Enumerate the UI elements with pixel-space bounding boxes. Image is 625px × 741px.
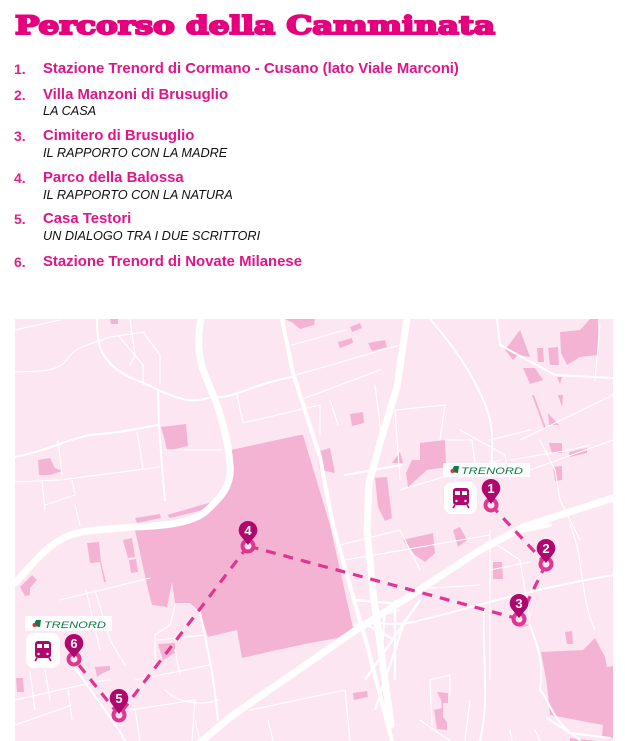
junction ramps [355,600,420,710]
parco della Balossa [135,435,353,658]
stop 3 [14,128,228,160]
icon: train west [26,633,60,668]
stop 3: Cimitero di Brusuglio [43,128,194,144]
walking route [74,505,546,715]
stop 4 [14,170,233,202]
stop 4: IL RAPPORTO CON LA NATURA [43,188,233,202]
marker 6: 6 [70,636,78,651]
trenord label west: TRENORD [44,620,106,631]
marker 4: 4 [244,523,252,538]
marker 4 [239,521,257,552]
park and building blocks [16,319,613,741]
stop 6: 6. [14,254,26,270]
main roads [15,319,613,741]
stop 5: 5. [14,211,26,227]
marker 5 [110,689,128,720]
stop 1: Stazione Trenord di Cormano - Cusano (lato Viale Marconi) [43,61,459,77]
stop 1: 1. [14,61,26,77]
stop 5: UN DIALOGO TRA I DUE SCRITTORI [43,229,260,243]
marker 3: 3 [515,596,523,611]
title: Percorso della Camminata [15,11,495,40]
stop 4: Parco della Balossa [43,170,184,186]
icon: train east [444,482,477,514]
map [15,319,613,741]
marker 1 [482,479,500,510]
marker 2: 2 [542,541,550,556]
stop 2: Villa Manzoni di Brusuglio [43,87,228,103]
marker 2 [537,539,555,570]
marker 3 [510,594,528,624]
stop 2: 2. [14,87,26,103]
marker 5: 5 [115,691,123,706]
stop 6: Stazione Trenord di Novate Milanese [43,254,302,270]
trenord label east: TRENORD [461,466,523,477]
trenord label west [25,616,112,631]
stop 3: IL RAPPORTO CON LA MADRE [43,146,227,160]
marker 1: 1 [487,481,495,496]
stop 2 [14,87,228,118]
stop 4: 4. [14,170,26,186]
stop 5 [14,211,260,243]
map background [15,319,613,741]
stop 3: 3. [14,128,26,144]
marker 6 [65,634,83,664]
minor roads [15,319,613,741]
stop 2: LA CASA [43,104,96,118]
road network [15,319,613,741]
trenord label east [443,463,530,477]
stop 5: Casa Testori [43,211,131,227]
stop list [14,61,459,270]
